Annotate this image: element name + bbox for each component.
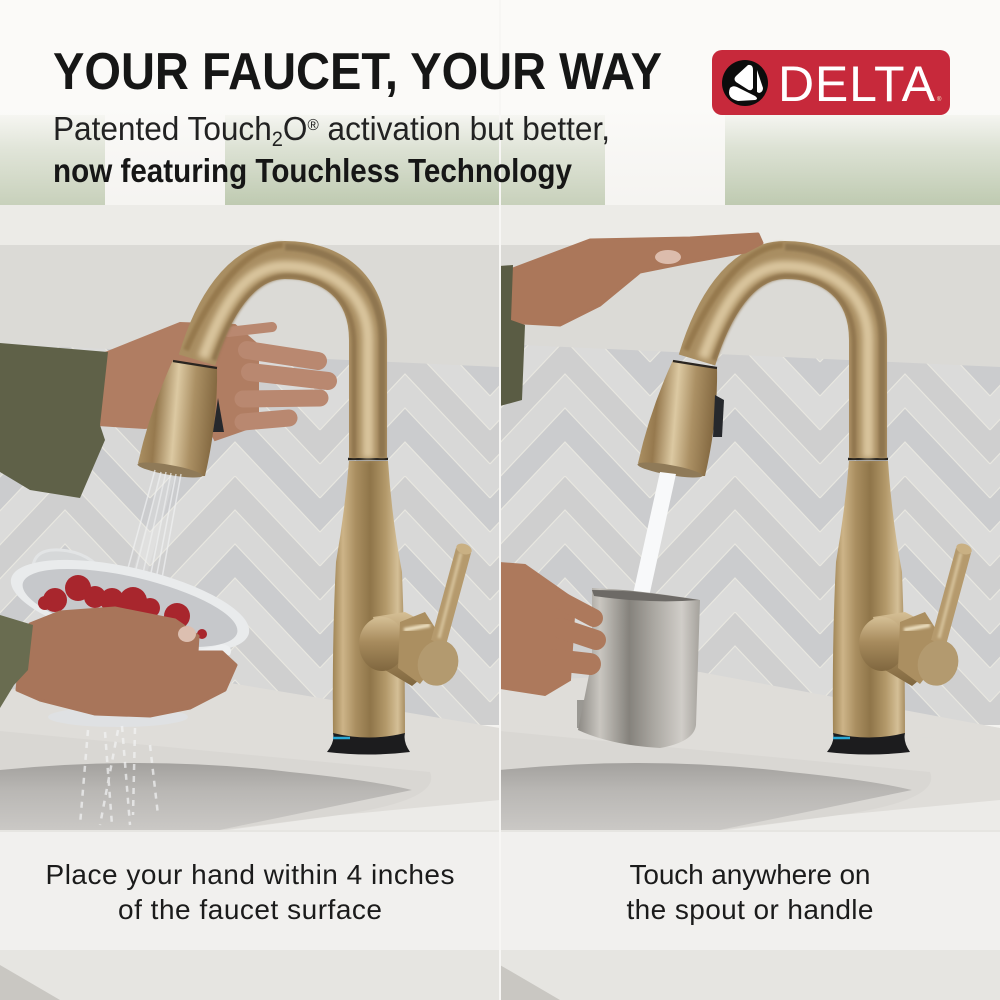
caption band left [0, 832, 499, 950]
sleeve upper arm [0, 343, 108, 498]
water spray [128, 470, 182, 576]
logo: Delta [712, 50, 950, 115]
panel: left photo, hand near faucet [0, 115, 499, 1000]
water drips [80, 726, 158, 825]
handle black sprayer button [213, 398, 224, 432]
caption right: Touch anywhere on [630, 859, 870, 890]
registered mark: ® [937, 96, 942, 103]
panel: right photo, hand touching faucet [501, 115, 1000, 1000]
raspberries [38, 575, 207, 639]
subtitle line one: 2 [272, 128, 283, 151]
icon: colander base [48, 710, 188, 727]
hand above faucet [97, 323, 328, 440]
caption right: the spout or handle [626, 894, 874, 925]
caption left: Place your hand within 4 inches [46, 859, 454, 890]
metal cup [577, 588, 700, 748]
subtitle line one: ® [307, 117, 319, 134]
faucet left [137, 245, 473, 754]
sleeve lower arm [0, 615, 33, 708]
sprayer button [713, 395, 724, 437]
icon: delta emblem [722, 60, 768, 106]
lower hand [17, 608, 236, 716]
colander [11, 548, 250, 656]
counter back edge right [501, 672, 994, 727]
caption right [626, 859, 874, 925]
holding hand [500, 563, 596, 695]
faucet right [637, 245, 973, 754]
caption band right [501, 832, 1000, 950]
divider [499, 0, 501, 1000]
hand touching spout [505, 234, 762, 325]
title: YOUR FAUCET, YOUR WAY [53, 43, 662, 101]
fingernail [655, 250, 681, 264]
caption left [46, 859, 454, 925]
subtitle line one: Patented Touch [53, 110, 282, 147]
thumb nail [178, 626, 196, 642]
subtitle line one: O [283, 110, 307, 147]
subtitle line two: now featuring Touchless Technology [53, 152, 573, 189]
logo wordmark: DELTA [778, 56, 936, 112]
caption left: of the faucet surface [118, 894, 382, 925]
water stream [633, 472, 676, 597]
subtitle line one: activation but better, [319, 110, 610, 147]
sleeve [500, 265, 525, 406]
